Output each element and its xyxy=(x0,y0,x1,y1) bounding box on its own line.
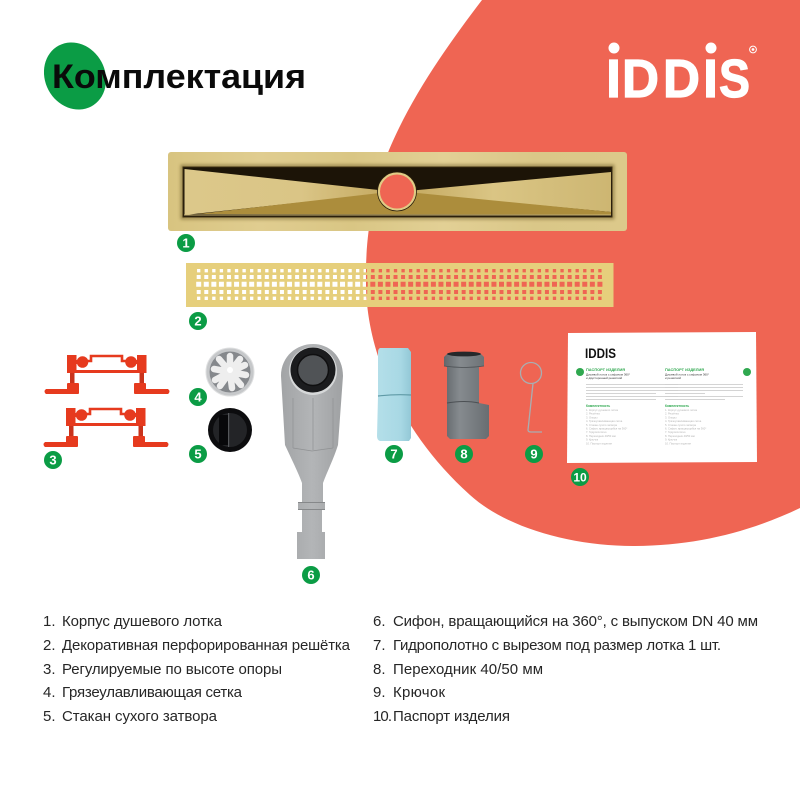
legend: right column: 6. xyxy=(373,613,386,630)
legend: left column: 3. xyxy=(43,661,56,678)
legend: right column xyxy=(373,613,758,725)
badge 3: 3 xyxy=(49,452,57,468)
passport left column: 10. Паспорт изделия xyxy=(586,441,612,445)
legend: left column: Декоративная перфорированная решётка xyxy=(62,637,351,654)
passport left column xyxy=(576,367,678,445)
legend: right column: 10. xyxy=(373,708,392,725)
legend: right column: Сифон, вращающийся на 360°, с выпуском DN 40 мм xyxy=(393,613,758,630)
legend: right column: 8. xyxy=(373,661,386,678)
passport left column: Душевой лоток с сифоном 360° xyxy=(586,372,631,376)
badge 5: 5 xyxy=(194,446,202,462)
passport left column: ПАСПОРТ ИЗДЕЛИЯ xyxy=(586,367,625,372)
passport right column: 6. Сифон, вращающийся на 360° xyxy=(665,426,706,430)
legend: left column: Корпус душевого лотка xyxy=(62,613,223,630)
legend: left column: 1. xyxy=(43,613,56,630)
badge 10 xyxy=(571,468,589,486)
passport left column: 7. Гидрополотно xyxy=(586,430,607,434)
item 9: hook xyxy=(520,362,542,432)
item 1: shower drain body xyxy=(168,152,627,231)
passport right column: и решёткой xyxy=(665,376,681,380)
badge 3 xyxy=(44,451,62,469)
item 7: waterproofing cloth xyxy=(377,348,411,441)
badge 7: 7 xyxy=(390,446,398,462)
item 2: perforated grate xyxy=(186,263,614,307)
passport left column: 5. Стакан сухого затвора xyxy=(586,423,618,427)
green blob behind heading xyxy=(32,31,118,121)
passport left column: 1. Корпус душевого лотка xyxy=(586,408,619,412)
legend: left column: Грязеулавливающая сетка xyxy=(62,684,243,701)
coral background shape xyxy=(366,0,800,546)
logo: IDDIS: I xyxy=(606,49,621,109)
passport right column: ПАСПОРТ ИЗДЕЛИЯ xyxy=(665,367,704,372)
badge 6: 6 xyxy=(307,568,315,582)
passport right column xyxy=(665,367,751,445)
legend: right column: Крючок xyxy=(393,684,445,701)
item 8: adapter 40/50 xyxy=(444,352,489,439)
passport right column: 4. Грязеулавливающая сетка xyxy=(665,419,702,423)
logo: IDDIS: D xyxy=(622,49,659,109)
logo: IDDIS: S xyxy=(719,49,750,109)
upper support xyxy=(44,355,170,394)
legend: left column: 5. xyxy=(43,708,56,725)
legend: left column: Регулируемые по высоте опоры xyxy=(62,661,282,678)
legend: left column: Стакан сухого затвора xyxy=(62,708,218,725)
badge 6 xyxy=(302,566,320,584)
passport left column: 3. Опоры xyxy=(586,415,598,419)
badge 1 xyxy=(177,234,195,252)
passport left column: и двусторонней решёткой xyxy=(586,376,622,380)
badge 9: 9 xyxy=(530,446,538,462)
badge 4: 4 xyxy=(194,390,202,404)
passport right column: Душевой лоток с сифоном 360° xyxy=(665,372,710,376)
legend: left column: 4. xyxy=(43,684,56,701)
passport left column: 6. Сифон, вращающийся на 360° xyxy=(586,426,627,430)
badge 1: 1 xyxy=(182,236,190,250)
legend: right column: Переходник 40/50 мм xyxy=(393,661,543,678)
passport right column: Комплектность xyxy=(665,404,689,408)
passport left column: 8. Переходник 40/50 мм xyxy=(586,434,616,438)
badge 10: 10 xyxy=(573,470,587,484)
badge 2 xyxy=(189,312,207,330)
lower support xyxy=(44,408,168,447)
passport right column: 2. Решётка xyxy=(665,412,679,416)
passport left column: 4. Грязеулавливающая сетка xyxy=(586,419,623,423)
passport right column: 8. Переходник 40/50 мм xyxy=(665,434,695,438)
badge 7 xyxy=(385,445,403,463)
badge 5 xyxy=(189,445,207,463)
passport right column: 10. Паспорт изделия xyxy=(665,441,691,445)
passport right column: 7. Гидрополотно xyxy=(665,430,686,434)
legend: left column: 2. xyxy=(43,637,56,654)
legend: right column: 9. xyxy=(373,684,386,701)
passport logo: IDDIS xyxy=(585,345,616,361)
passport left column: 2. Решётка xyxy=(586,412,600,416)
passport left column: Комплектность xyxy=(586,404,610,408)
badge 4 xyxy=(189,388,207,406)
item 10: product passport xyxy=(567,332,757,463)
badge 9 xyxy=(525,445,543,463)
legend: right column: Гидрополотно с вырезом под размер лотка 1 шт. xyxy=(393,637,721,654)
badge 8 xyxy=(455,445,473,463)
badge 8: 8 xyxy=(460,446,468,462)
item 4: strainer mesh xyxy=(206,348,254,396)
item 3: adjustable supports xyxy=(44,355,170,447)
badge 2: 2 xyxy=(194,314,202,328)
item 6: siphon xyxy=(281,344,343,559)
item 5: dry trap cup xyxy=(208,408,252,452)
passport right column: 3. Опоры xyxy=(665,415,677,419)
heading text: Комплектация xyxy=(52,58,306,96)
passport right column: 9. Крючок xyxy=(665,438,678,442)
heading: Комплектация xyxy=(32,31,306,121)
passport right column: 1. Корпус душевого лотка xyxy=(665,408,698,412)
logo: IDDIS xyxy=(606,42,756,109)
legend: right column: Паспорт изделия xyxy=(393,708,510,725)
legend: left column xyxy=(43,613,351,725)
passport left column: 9. Крючок xyxy=(586,438,599,442)
legend: right column: 7. xyxy=(373,637,386,654)
passport right column: 5. Стакан сухого затвора xyxy=(665,423,697,427)
logo: IDDIS: I xyxy=(703,49,718,109)
logo: IDDIS: D xyxy=(663,49,700,109)
